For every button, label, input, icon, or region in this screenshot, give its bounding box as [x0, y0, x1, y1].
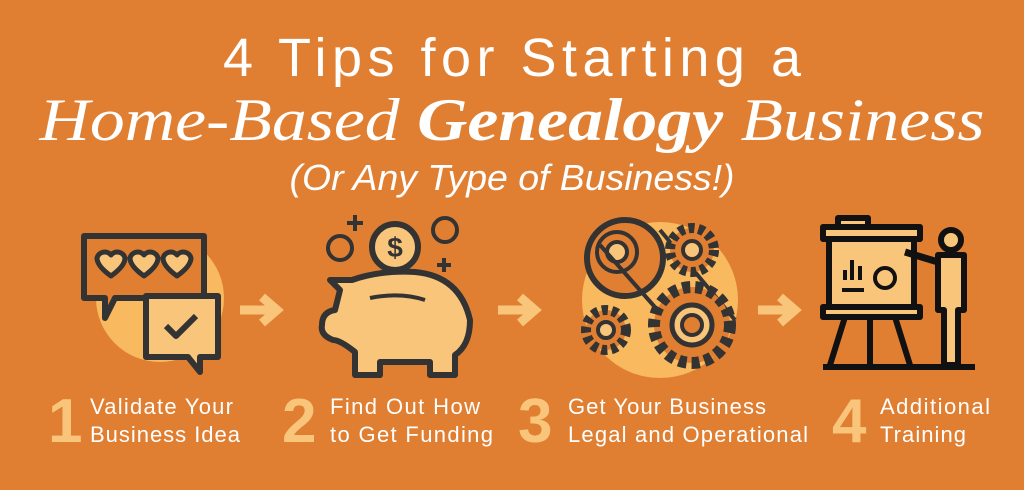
step 1 label [48, 387, 241, 456]
step 4 label: 4 [832, 387, 867, 456]
icon: chat bubbles [84, 234, 224, 372]
step 2 label [282, 387, 493, 456]
step 4 label [832, 387, 990, 456]
icon: gears [582, 220, 738, 378]
step 3 label: Legal and Operational [568, 422, 808, 447]
title: 4 Tips for Starting a [223, 28, 802, 88]
arrow 2 [498, 297, 535, 323]
arrow 3 [758, 297, 795, 323]
step 2 label: Find Out How [330, 394, 480, 419]
step 1 label: 1 [48, 387, 82, 456]
step 3 label [518, 387, 808, 456]
icon: presentation easel [823, 218, 975, 367]
step 1 label: Business Idea [90, 422, 241, 447]
step 3 label: 3 [518, 387, 552, 456]
title: (Or Any Type of Business!) [290, 157, 734, 198]
arrow 1 [240, 297, 277, 323]
step 4 label: Training [880, 422, 966, 447]
step 1 label: Validate Your [90, 394, 233, 419]
step 2 label: to Get Funding [330, 422, 493, 447]
title: Home-Based Genealogy Business [38, 87, 984, 153]
icon: piggy bank: $ [387, 232, 403, 263]
icon: piggy bank [322, 215, 470, 375]
step 2 label: 2 [282, 387, 316, 456]
title [38, 28, 984, 198]
step 3 label: Get Your Business [568, 394, 766, 419]
step 4 label: Additional [880, 394, 990, 419]
